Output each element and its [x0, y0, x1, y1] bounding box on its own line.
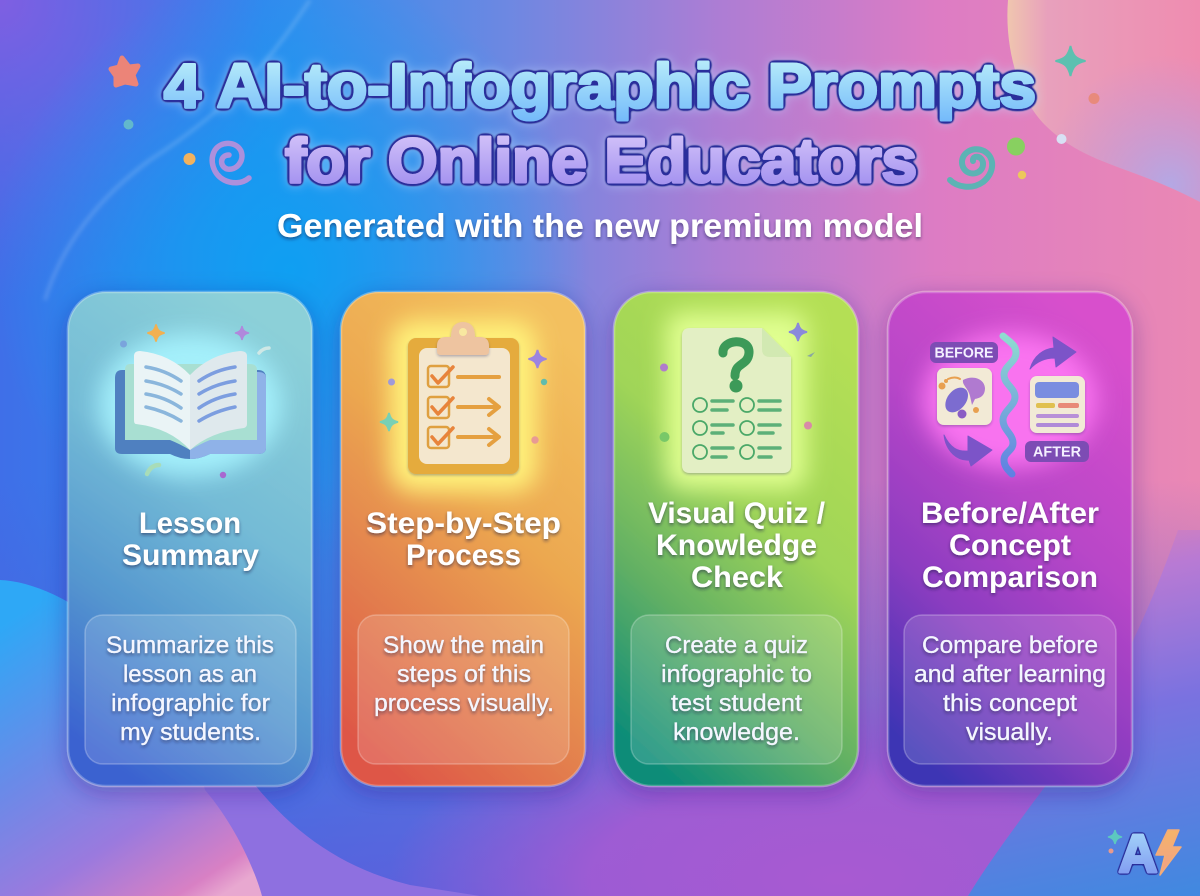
sparkle purple — [789, 323, 807, 341]
dot blue — [120, 340, 127, 348]
prompt box: Show the main — [383, 632, 544, 659]
title — [164, 52, 1036, 196]
after badge: AFTER — [1033, 444, 1082, 460]
prompt box: steps of this — [397, 661, 531, 688]
decorative shapes around title — [111, 46, 1100, 187]
letter A: A — [1118, 824, 1158, 884]
dot orange — [184, 153, 196, 165]
wavy divider — [1003, 336, 1016, 474]
prompt box: process visually. — [374, 690, 554, 717]
heading: Visual Quiz / — [648, 497, 826, 530]
sparkle orange — [148, 324, 164, 342]
arrow lower — [944, 435, 992, 466]
sparkle purple — [528, 350, 546, 368]
prompt box: knowledge. — [673, 719, 800, 746]
heading: Lesson — [139, 507, 241, 540]
before image — [937, 368, 992, 425]
sparkle purple — [235, 326, 249, 340]
icon: purple spiral — [212, 143, 249, 183]
after document — [1030, 376, 1085, 433]
heading: Before/After — [921, 497, 1099, 530]
prompt box — [904, 615, 1116, 764]
sparkle teal — [1056, 46, 1086, 76]
prompt box: infographic for — [111, 690, 270, 717]
heading: Check — [691, 561, 783, 594]
sparkle teal — [380, 413, 398, 431]
prompt box: test student — [671, 690, 802, 717]
dot coral — [1088, 93, 1100, 104]
heading — [648, 497, 826, 594]
heading: Concept — [949, 529, 1071, 562]
prompt box: visually. — [966, 719, 1053, 746]
prompt box: Create a quiz — [665, 632, 808, 659]
panel: step-by-step process — [341, 292, 585, 786]
heading — [921, 497, 1099, 594]
heading: Comparison — [922, 561, 1098, 594]
prompt box — [358, 615, 569, 764]
dot purple — [660, 364, 668, 372]
icon: open book — [98, 333, 282, 477]
title: 4 AI-to-Infographic Prompts — [164, 52, 1036, 121]
confetti — [807, 352, 815, 357]
prompt box — [85, 615, 296, 764]
prompt box — [631, 615, 842, 764]
panel: visual quiz — [614, 292, 858, 786]
sparkle teal — [1108, 830, 1122, 844]
panel: before/after comparison — [888, 292, 1132, 786]
dot pink — [804, 422, 812, 430]
confetti green — [147, 465, 159, 474]
icon: lightning bolt — [1156, 830, 1181, 875]
arrow upper — [1030, 337, 1076, 369]
before badge — [930, 342, 998, 363]
panel: lesson summary — [68, 292, 312, 786]
heading: Process — [406, 539, 521, 572]
prompt box: Compare before — [922, 632, 1098, 659]
dot coral — [1108, 848, 1114, 854]
icon: before and after — [922, 332, 1098, 474]
dot yellow — [1018, 171, 1026, 179]
logo — [1108, 824, 1181, 884]
prompt box: Summarize this — [106, 632, 274, 659]
dot pale — [1056, 134, 1066, 144]
icon: teal spiral — [950, 149, 992, 187]
prompt box: this concept — [943, 690, 1077, 717]
heading — [122, 507, 259, 572]
before badge: BEFORE — [934, 346, 994, 362]
prompt box: infographic to — [661, 661, 812, 688]
dot green — [660, 432, 670, 442]
title: for Online Educators — [285, 127, 917, 196]
question mark — [723, 342, 749, 392]
dot lilac — [388, 378, 395, 386]
dot teal — [124, 120, 134, 130]
after badge — [1025, 441, 1089, 462]
confetti pale — [259, 348, 269, 353]
dot green — [1007, 138, 1025, 156]
icon: clipboard checklist — [390, 320, 537, 492]
heading: Knowledge — [656, 529, 817, 562]
prompt box: lesson as an — [123, 661, 257, 688]
prompt box: and after learning — [914, 661, 1106, 688]
prompt box: my students. — [120, 719, 261, 746]
heading: Step-by-Step — [366, 507, 561, 540]
heading: Summary — [122, 539, 259, 572]
dot purple — [220, 472, 226, 478]
icon: quiz sheet — [666, 312, 807, 489]
icon: coral star — [111, 58, 138, 85]
heading — [366, 507, 561, 572]
dot teal — [541, 379, 547, 385]
subtitle: Generated with the new premium model — [277, 207, 923, 244]
dot pink — [531, 436, 539, 444]
